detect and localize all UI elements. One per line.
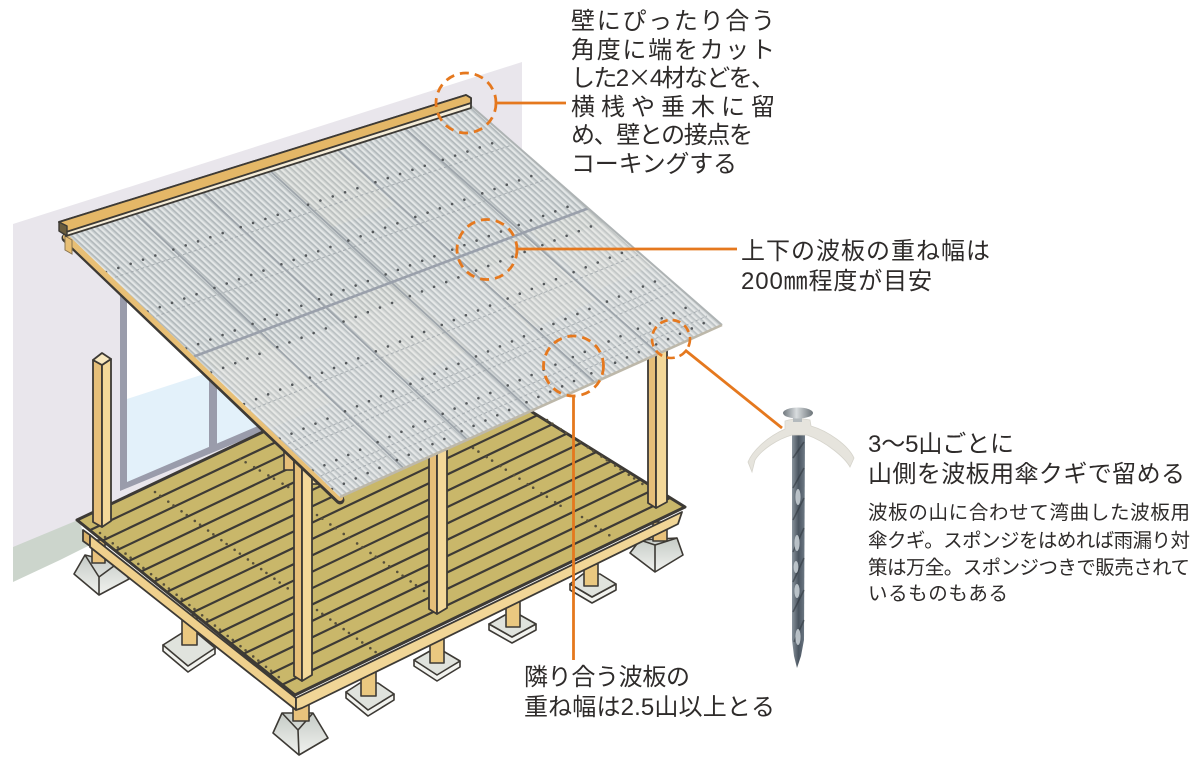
panel side seams	[132, 126, 658, 468]
deck support stubs and footings	[74, 522, 683, 755]
leader line: ridge	[496, 102, 566, 104]
text: nail description: いるものもある	[868, 583, 1008, 605]
text: vertical overlap note: 200㎜程度が目安	[741, 268, 932, 295]
callout marker: nail position	[652, 320, 690, 358]
text: nail description	[868, 502, 1190, 605]
post: rear bracket	[284, 450, 320, 484]
footing: left	[74, 540, 129, 595]
text: nail heading	[868, 431, 1185, 488]
wall base band	[13, 520, 90, 582]
text: ridge flashing note: 横桟や垂木に留	[571, 94, 775, 121]
footing: right	[630, 522, 683, 572]
post: right	[648, 350, 667, 508]
footing: flat 2	[346, 672, 394, 716]
text: ridge flashing note: め、壁との接点を	[571, 122, 753, 149]
text: side overlap note: 隣り合う波板の	[524, 664, 690, 691]
post: front centre	[294, 458, 312, 681]
text: vertical overlap note: 上下の波板の重ね幅は	[741, 238, 990, 265]
text: ridge flashing note	[571, 8, 775, 178]
callout marker: ridge	[436, 73, 496, 133]
wall	[13, 62, 522, 547]
callout marker: side overlap	[544, 336, 604, 396]
faint double purlin lines	[110, 145, 707, 484]
deck surface	[77, 351, 685, 695]
post: left	[93, 353, 111, 527]
window	[120, 285, 272, 491]
text: ridge flashing note: コーキングする	[571, 151, 737, 178]
screw dots	[106, 138, 714, 489]
roof right edge	[470, 105, 722, 325]
roof eave edge	[340, 325, 722, 497]
text: nail description: 策は万全。スポンジつきで販売されて	[868, 557, 1190, 579]
lower roof white haze	[213, 245, 716, 495]
footing: flat 3	[414, 638, 460, 681]
leader line: vertical overlap	[517, 248, 737, 250]
footing: flat 1	[163, 615, 215, 672]
text: ridge flashing note: 角度に端をカット	[571, 37, 775, 64]
text: nail heading: 山側を波板用傘クギで留める	[868, 461, 1185, 488]
leader line: nail	[685, 350, 782, 428]
text: side overlap note	[524, 664, 775, 721]
nail head	[783, 408, 813, 422]
footing: flat 5	[570, 564, 616, 603]
text: nail description: 波板の山に合わせて湾曲した波板用	[868, 502, 1190, 524]
ridge beam	[59, 95, 471, 236]
icon: umbrella nail	[748, 408, 854, 668]
callout marker: vertical overlap	[457, 220, 517, 280]
post: front middle	[429, 450, 447, 614]
corrugated roof	[65, 105, 722, 497]
text: ridge flashing note: 壁にぴったり合う	[571, 8, 775, 35]
nail shaft	[792, 432, 805, 668]
sponge washer	[748, 419, 854, 472]
rafter under roof edge	[65, 236, 340, 500]
deck screw dots	[100, 420, 647, 678]
deck board lines	[90, 360, 670, 685]
horizontal overlap seam	[194, 208, 588, 356]
deck fascia	[83, 512, 682, 710]
footing: flat 4	[489, 602, 536, 643]
leader line: side overlap	[572, 396, 575, 660]
text: ridge flashing note: した2×4材などを、	[571, 58, 775, 93]
text: vertical overlap note	[741, 238, 990, 295]
text: side overlap note: 重ね幅は2.5山以上とる	[524, 694, 775, 721]
text: nail heading: 3〜5山ごとに	[868, 431, 1014, 458]
footing: front corner	[273, 703, 328, 755]
panel tints	[202, 152, 602, 370]
text: nail description: 傘クギ。スポンジをはめれば雨漏り対	[868, 530, 1190, 552]
